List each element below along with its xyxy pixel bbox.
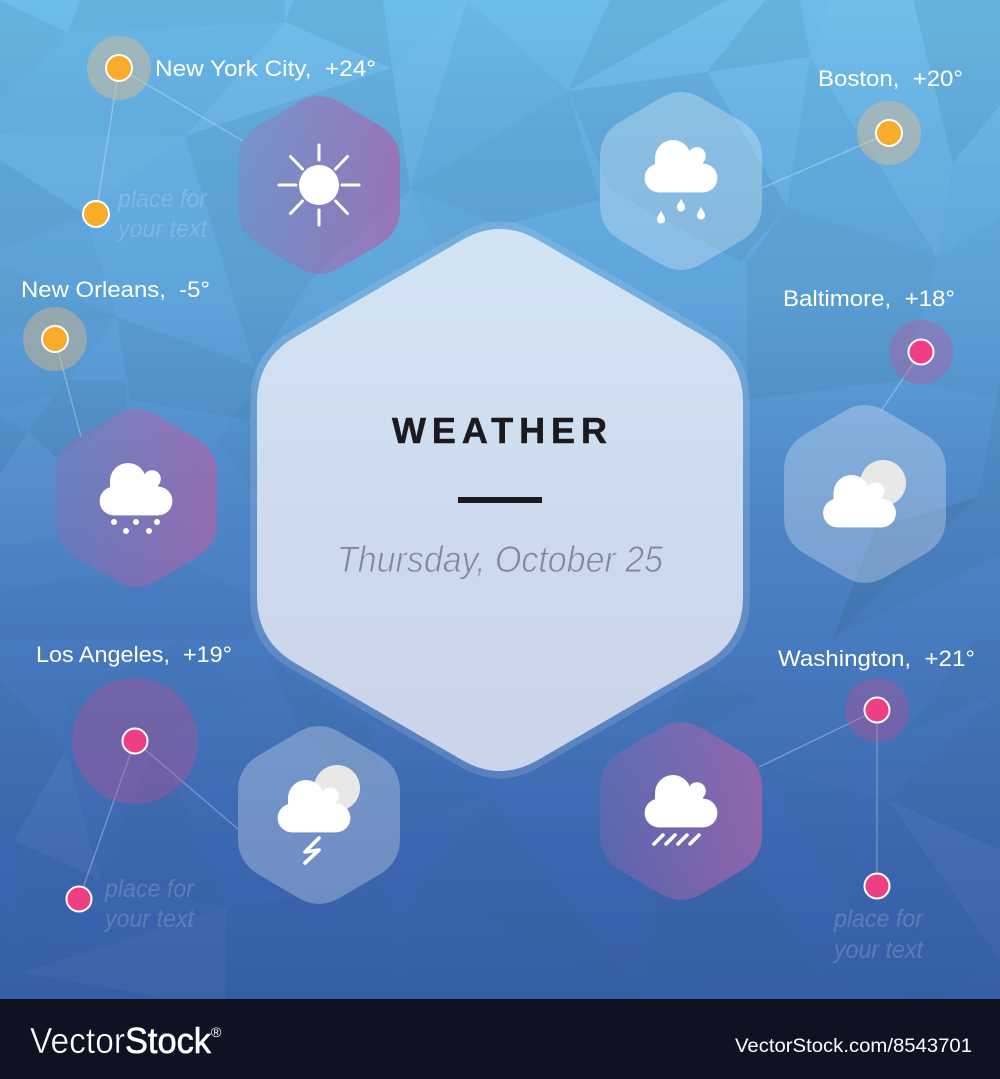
node: rain hexagon <box>600 722 762 900</box>
icon: sun behind cloud <box>823 460 906 527</box>
central hexagon panel <box>250 221 750 779</box>
footer logo <box>30 1020 222 1061</box>
icon: cloud with lightning <box>278 765 360 863</box>
marker: Washington note <box>864 874 890 898</box>
label: Los Angeles: Los Angeles, +19° <box>36 642 232 667</box>
footer logo: ® <box>211 1024 222 1040</box>
node: sun hexagon <box>238 96 400 274</box>
marker: New Orleans <box>23 307 87 371</box>
note text: Washington: place for <box>833 905 925 933</box>
marker: Los Angeles <box>72 678 198 804</box>
footer logo: Stock <box>125 1020 212 1061</box>
note text: New York City: your text <box>116 215 208 243</box>
note text: New York City: place for <box>117 185 209 213</box>
marker: New York City note <box>83 201 109 227</box>
label: Baltimore: Baltimore, +18° <box>783 286 955 311</box>
note text: Washington: your text <box>832 936 924 964</box>
label: New York City: New York City, +24° <box>155 56 376 81</box>
icon: cloud with snow <box>100 463 172 534</box>
marker: Boston <box>857 101 921 165</box>
marker: Baltimore <box>889 320 953 384</box>
node: rain drops hexagon <box>600 92 762 270</box>
footer logo: Vector <box>30 1020 125 1061</box>
icon: sun <box>279 145 359 225</box>
label: Boston: Boston, +20° <box>818 66 963 91</box>
note text: New York City <box>116 185 209 243</box>
title: WEATHER <box>392 410 607 451</box>
node: snow hexagon <box>55 409 217 587</box>
note text: Los Angeles <box>103 875 196 933</box>
title divider <box>458 497 542 503</box>
label: New Orleans: New Orleans, -5° <box>21 277 210 302</box>
connector lines <box>55 68 921 899</box>
icon: cloud with slanted rain <box>645 775 717 844</box>
note text: Los Angeles: place for <box>104 875 196 903</box>
date subtitle: Thursday, October 25 <box>337 539 663 580</box>
note text: Washington <box>832 905 925 964</box>
node: storm hexagon <box>238 726 400 904</box>
footer bar <box>0 999 1000 1079</box>
marker: Washington <box>845 678 909 742</box>
marker: New York City <box>87 36 151 100</box>
footer image id: VectorStock.com/8543701 <box>735 1036 972 1057</box>
note text: Los Angeles: your text <box>103 905 195 933</box>
icon: cloud with raindrops <box>645 140 717 224</box>
marker: Los Angeles note <box>66 886 92 912</box>
label: Washington: Washington, +21° <box>778 646 975 671</box>
node: partly cloudy hexagon <box>784 405 946 583</box>
